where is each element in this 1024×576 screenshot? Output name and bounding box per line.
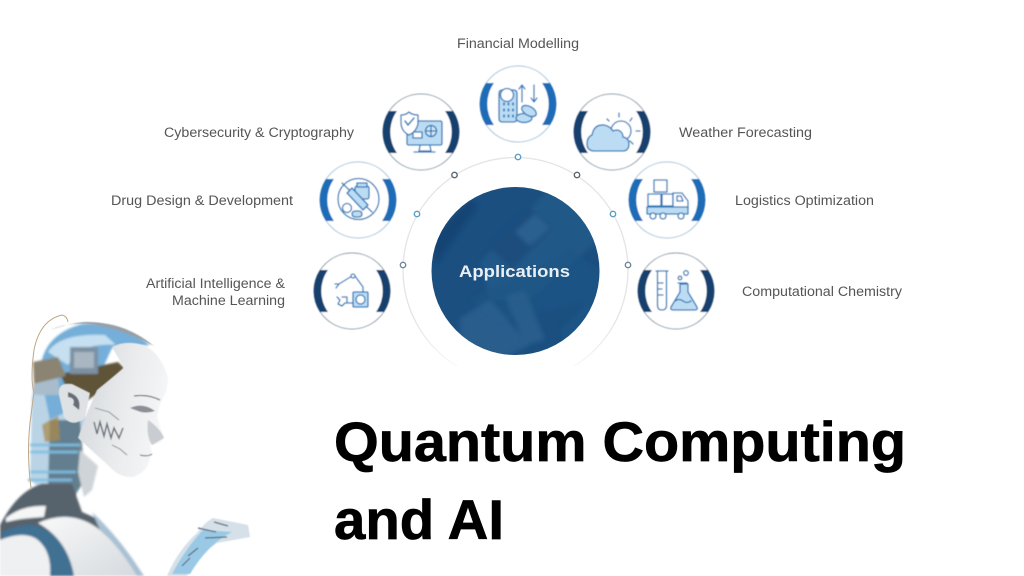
outer ring xyxy=(395,158,635,396)
robot body and shoulders xyxy=(0,484,144,576)
icon: syringe and pills xyxy=(338,178,379,220)
center heading: Applications xyxy=(459,262,570,281)
label: Computational Chemistry: Computational Chemistry xyxy=(742,284,903,300)
item: Weather Forecasting xyxy=(574,94,650,170)
robot hand xyxy=(167,518,250,576)
item: Artificial Intelligence & Machine Learning xyxy=(314,253,390,329)
illustration: robot xyxy=(0,315,250,576)
label: Weather Forecasting: Weather Forecasting xyxy=(679,125,812,141)
central circle: Applications xyxy=(430,187,610,360)
robot skull cap and wire xyxy=(28,315,154,488)
item: Logistics Optimization xyxy=(629,162,705,238)
icon: test tube and flask xyxy=(656,271,697,310)
icon: delivery truck with boxes xyxy=(647,180,688,219)
item: Financial Modelling xyxy=(480,66,556,142)
label: Logistics Optimization: Logistics Optimization xyxy=(735,193,874,209)
icon: calculator, coins and arrows xyxy=(499,85,538,122)
robot face xyxy=(78,343,168,477)
title: and AI xyxy=(334,488,504,551)
icon: shield and monitor xyxy=(401,112,442,152)
label: Drug Design & Development: Drug Design & Development xyxy=(111,193,293,209)
robot neck and transparent blue wires xyxy=(28,385,98,500)
label: Artificial Intelligence & Machine Learning: Artificial Intelligence & xyxy=(146,276,286,292)
icon: robot arm and circuit xyxy=(335,274,368,307)
item: Computational Chemistry xyxy=(638,253,714,329)
ring connector dots xyxy=(400,154,631,268)
title xyxy=(334,410,906,551)
label: Artificial Intelligence & Machine Learning: Machine Learning xyxy=(172,293,285,309)
robot ear xyxy=(59,384,90,423)
label: Financial Modelling: Financial Modelling xyxy=(457,36,579,52)
title: Quantum Computing xyxy=(334,410,906,473)
item: Cybersecurity & Cryptography xyxy=(383,94,459,170)
label: Artificial Intelligence & Machine Learning xyxy=(146,276,286,309)
icon: cloud and sun xyxy=(587,113,640,151)
item: Drug Design & Development xyxy=(320,162,396,238)
robot brain: blue cables and chip xyxy=(33,323,150,420)
label: Cybersecurity & Cryptography: Cybersecurity & Cryptography xyxy=(164,125,355,141)
